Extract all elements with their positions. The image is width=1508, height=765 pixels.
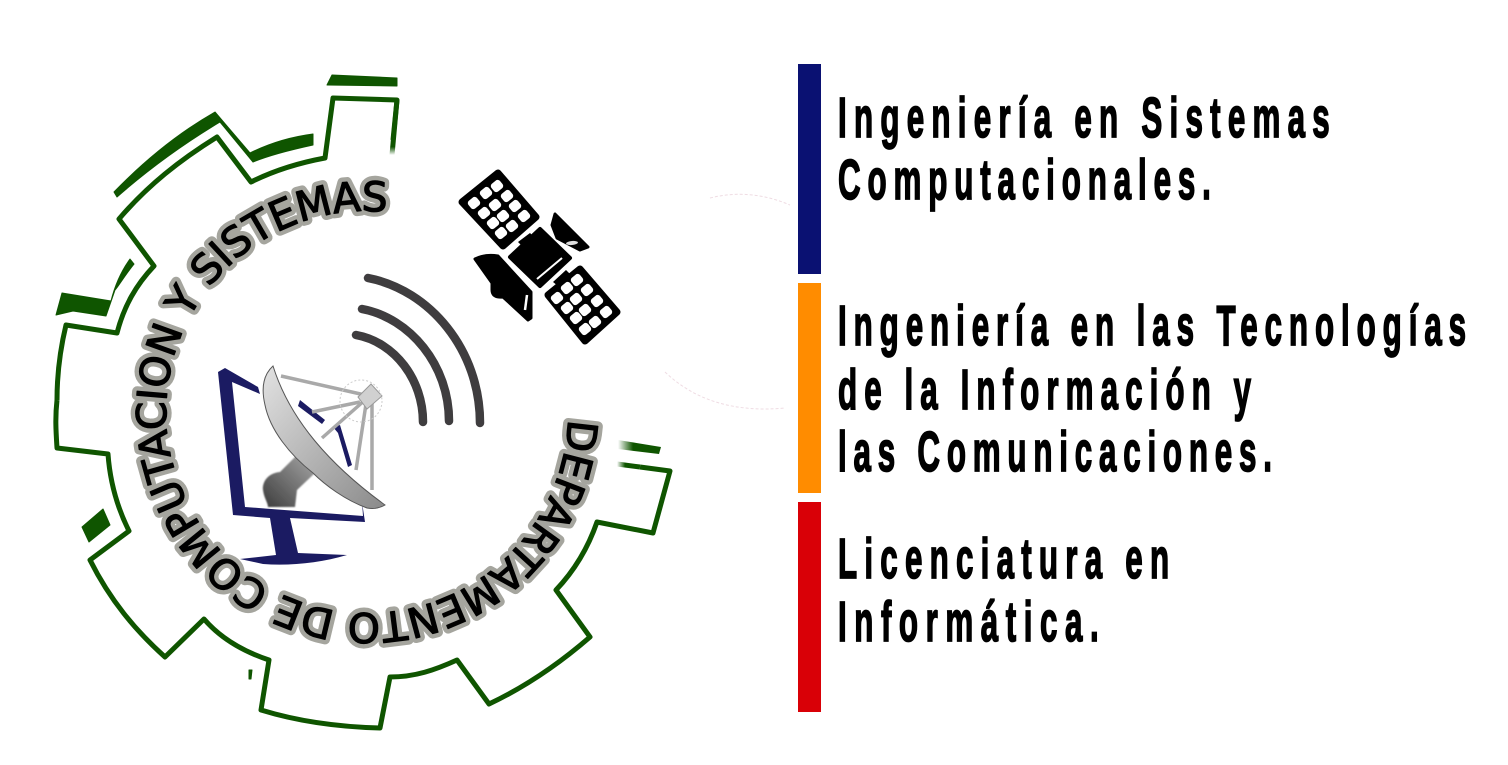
program: Licenciatura en Informática: Informática.	[838, 589, 1099, 653]
satellite wings	[475, 214, 588, 320]
bar: navy	[798, 64, 821, 274]
program: Ingeniería en las Tecnologías de la Información y las Comunicaciones	[838, 293, 1466, 483]
icon: satellite dish	[263, 366, 385, 509]
logo: department gear emblem	[53, 74, 672, 730]
dish base	[263, 455, 315, 507]
circular title text: DEPARTAMENTO DE COMPUTACION Y SISTEMAS	[130, 176, 603, 649]
panel cells	[467, 179, 613, 336]
program: Licenciatura en Informática: Licenciatura en	[838, 526, 1169, 590]
program: Ingeniería en Sistemas Computacionales: Computacionales.	[838, 147, 1211, 211]
solar panel lower	[548, 269, 617, 341]
program: Ingeniería en las Tecnologías de la Información y las Comunicaciones: Ingeniería en las Tecnologías	[838, 293, 1466, 357]
program: Licenciatura en Informática	[838, 526, 1169, 653]
dish feed arms	[281, 376, 372, 490]
gear highlight accents	[56, 75, 661, 679]
satellite body	[510, 229, 570, 286]
solar panel upper	[462, 173, 536, 246]
dish feed head	[358, 384, 382, 409]
panel connectors	[518, 233, 570, 286]
icon: satellite	[462, 173, 617, 341]
icon: monitor	[218, 368, 365, 565]
dish bowl	[263, 366, 385, 509]
satellite highlights	[537, 258, 562, 279]
program: Ingeniería en Sistemas Computacionales	[838, 85, 1330, 211]
icon: signal waves	[356, 278, 480, 423]
circular title text: DEPARTAMENTO DE COMPUTACION Y SISTEMAS	[135, 180, 598, 644]
program: Ingeniería en las Tecnologías de la Información y las Comunicaciones: de la Información y	[838, 357, 1251, 421]
bar: red	[798, 502, 821, 712]
program: Ingeniería en las Tecnologías de la Información y las Comunicaciones: las Comunicaciones.	[838, 419, 1272, 483]
gear outline	[56, 98, 670, 728]
bar: orange	[798, 283, 821, 493]
program: Ingeniería en Sistemas Computacionales: Ingeniería en Sistemas	[838, 85, 1330, 149]
